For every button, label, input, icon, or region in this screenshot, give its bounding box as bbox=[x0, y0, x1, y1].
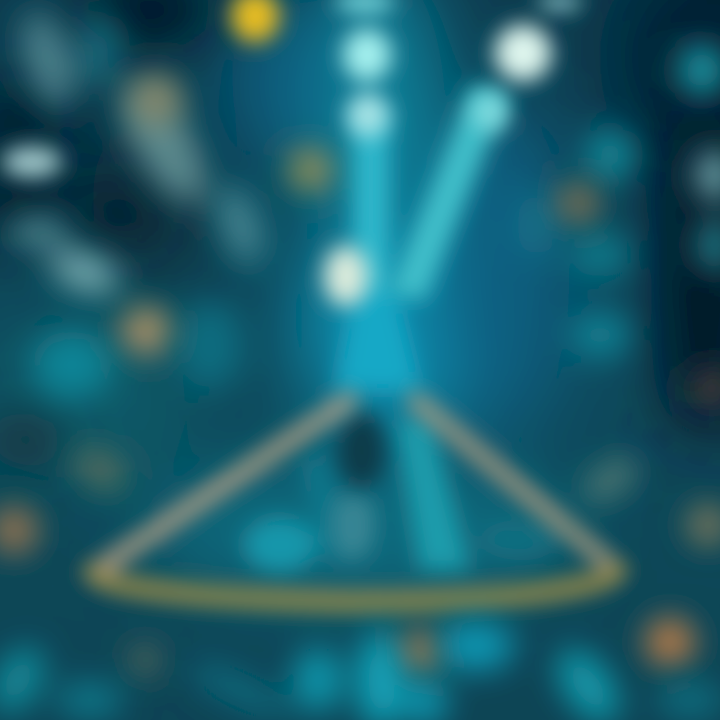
diagonal light beam bbox=[388, 85, 508, 300]
teal panels, left bbox=[32, 301, 242, 501]
yellow light bbox=[231, 0, 279, 42]
bottom teal shapes bbox=[0, 622, 720, 720]
dark central figure bbox=[338, 412, 386, 488]
triangle outline bbox=[92, 400, 618, 602]
teal panels, right bbox=[517, 44, 720, 357]
dark patches bbox=[0, 0, 720, 470]
left pale glow bbox=[2, 147, 62, 177]
glowing lights bbox=[324, 0, 582, 306]
central vertical light beam bbox=[335, 110, 420, 390]
triangle interior highlights bbox=[244, 420, 560, 572]
grey-teal diagonal streaks, upper left bbox=[6, 6, 273, 301]
